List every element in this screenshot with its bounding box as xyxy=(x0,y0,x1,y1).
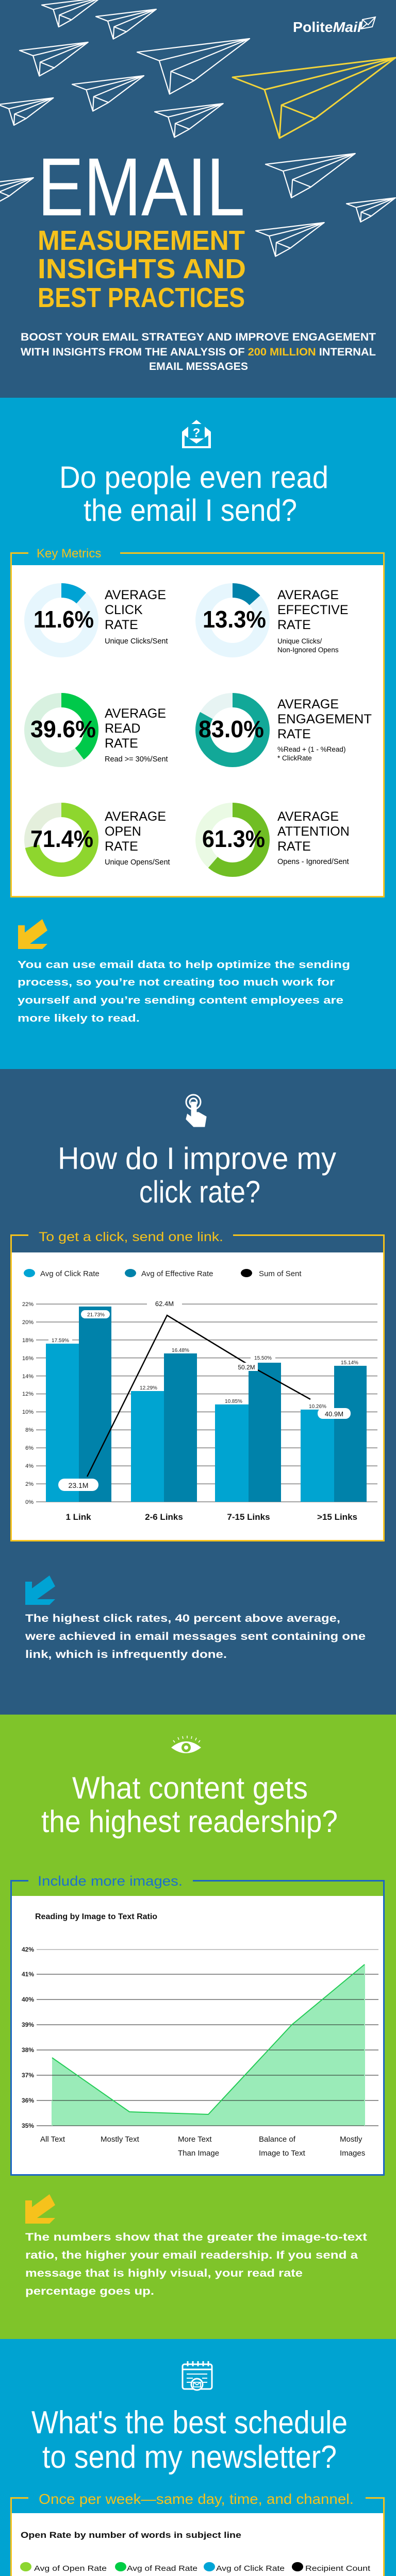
area series xyxy=(52,1964,365,2126)
heading: Do people even read the email I send?: the email I send? xyxy=(84,493,297,528)
panel: readership chart: Than Image xyxy=(178,2149,219,2158)
label: Include more images.: Include more images. xyxy=(38,1873,183,1889)
metric: effective rate: AVERAGE xyxy=(277,588,339,602)
panel: readership chart: 40% xyxy=(22,1996,34,2003)
panel: click rate chart: 6% xyxy=(25,1445,34,1451)
panel: click rate chart: 12% xyxy=(22,1391,34,1397)
bar value labels xyxy=(48,1310,358,1410)
text block: section 2 insight: were achieved in email messages sent containing one xyxy=(25,1631,366,1642)
metric: engagement rate: RATE xyxy=(277,727,311,741)
title: EMAIL Measurement Insights and Best Practices xyxy=(38,141,246,313)
title: EMAIL Measurement Insights and Best Practices: INSIGHTS AND xyxy=(38,253,246,284)
x-axis labels: 1 Link xyxy=(65,1512,91,1522)
icon: calendar with envelope xyxy=(183,2361,212,2390)
metric: attention rate: ATTENTION xyxy=(277,824,350,839)
legend: Recipient Count xyxy=(305,2564,371,2573)
subtitle: WITH INSIGHTS FROM THE ANALYSIS OF 200 MILLION INTERNAL xyxy=(21,346,376,358)
legend: Avg of Click Rate xyxy=(216,2564,285,2573)
paper planes illustration xyxy=(0,0,395,257)
metric: click rate: RATE xyxy=(105,618,138,632)
heading: Do people even read the email I send? xyxy=(59,460,328,528)
label: To get a click, send one link.: To get a click, send one link. xyxy=(39,1230,223,1244)
metric: read rate: RATE xyxy=(105,736,138,751)
panel: readership chart: 41% xyxy=(22,1971,34,1978)
metric: engagement rate: %Read + (1 - %Read) xyxy=(277,745,345,753)
header background xyxy=(0,0,396,398)
legend: Avg of Effective Rate xyxy=(141,1269,213,1278)
arrow: cyan xyxy=(25,1575,55,1605)
heading: What's the best schedule to send my newsletter?: to send my newsletter? xyxy=(42,2439,337,2475)
panel: click rate chart: 62.4M xyxy=(155,1300,174,1308)
legend xyxy=(20,2562,371,2573)
metric: open rate: RATE xyxy=(105,839,138,854)
icon: envelope with question mark: ? xyxy=(193,426,200,440)
panel: click rate chart: 8% xyxy=(25,1427,34,1433)
text block: section 1 insight: You can use email data to help optimize the sending xyxy=(18,959,350,971)
chart title: Open Rate by number of words in subject line xyxy=(21,2530,241,2540)
metric: attention rate: 61.3% xyxy=(202,825,265,852)
panel: readership chart: More Text xyxy=(178,2135,212,2144)
panel: readership chart: Mostly Text xyxy=(101,2135,140,2144)
heading: What content gets the highest readership?: What content gets xyxy=(72,1771,308,1805)
metric: open rate: AVERAGE xyxy=(105,809,166,824)
bars xyxy=(46,1307,367,1502)
metric: attention rate: Opens - Ignored/Sent xyxy=(277,858,349,866)
metric: read rate: AVERAGE xyxy=(105,706,166,721)
x-axis labels: 7-15 Links xyxy=(227,1512,270,1522)
bar value labels: 10.26% xyxy=(309,1404,326,1410)
panel: readership chart: Images xyxy=(340,2149,365,2158)
panel: click rate chart: 2% xyxy=(25,1481,34,1487)
panel: click rate chart: 18% xyxy=(22,1337,34,1344)
section 4 background xyxy=(0,2339,396,2576)
metric: engagement rate xyxy=(199,697,372,762)
label: Key Metrics: Key Metrics xyxy=(37,547,101,561)
panel: schedule chart xyxy=(11,2488,384,2576)
panel: readership chart xyxy=(11,1871,384,2175)
bar value labels: 15.50% xyxy=(254,1355,272,1361)
section 1 background xyxy=(0,398,396,1069)
heading: What's the best schedule to send my newsletter? xyxy=(31,2405,348,2475)
heading: How do I improve my click rate?: click rate? xyxy=(139,1175,260,1209)
title: EMAIL Measurement Insights and Best Practices: MEASUREMENT xyxy=(38,225,245,256)
text block: section 1 insight: more likely to read. xyxy=(18,1013,140,1024)
heading: What's the best schedule to send my newsletter?: What's the best schedule xyxy=(31,2405,348,2441)
panel: readership chart: 36% xyxy=(22,2097,34,2104)
subtitle: BOOST YOUR EMAIL STRATEGY AND IMPROVE ENGAGEMENT xyxy=(21,331,376,343)
metric: read rate xyxy=(30,700,168,764)
metric: engagement rate: * ClickRate xyxy=(277,754,312,762)
text block: section 3 insight: message that is highly visual, your read rate xyxy=(25,2267,303,2279)
panel: readership chart: Mostly xyxy=(340,2135,362,2144)
text block: section 3 insight: ratio, the higher your email readership. If you send a xyxy=(25,2249,358,2261)
bar value labels: 21.73% xyxy=(87,1312,105,1318)
legend: Avg of Read Rate xyxy=(127,2564,197,2573)
subtitle: EMAIL MESSAGES xyxy=(149,361,248,372)
metric: effective rate: EFFECTIVE xyxy=(277,603,349,617)
bar value labels: 17.59% xyxy=(52,1338,69,1344)
section 3 background xyxy=(0,1715,396,2339)
legend xyxy=(24,1269,302,1278)
metric: attention rate: RATE xyxy=(277,839,311,854)
bar value labels: 10.85% xyxy=(225,1399,242,1404)
arrow: yellow xyxy=(18,919,47,949)
panel: readership chart: Balance of xyxy=(259,2135,296,2144)
panel: click rate chart: 10% xyxy=(22,1409,34,1415)
metric: open rate: OPEN xyxy=(105,824,141,839)
heading: What content gets the highest readership? xyxy=(41,1771,338,1839)
metric: open rate xyxy=(30,809,170,870)
metric: attention rate xyxy=(202,809,350,870)
metric: effective rate: Non-Ignored Opens xyxy=(277,646,339,654)
metric: engagement rate: 83.0% xyxy=(199,716,264,742)
text block: section 3 insight xyxy=(25,2231,367,2297)
chart title: Reading by Image to Text Ratio xyxy=(35,1912,157,1921)
panel: click rate chart: 14% xyxy=(22,1374,34,1380)
panel: readership chart: 42% xyxy=(22,1946,34,1953)
x-axis labels: >15 Links xyxy=(317,1512,357,1522)
panel: click rate chart: 4% xyxy=(25,1463,34,1469)
text block: section 1 insight: yourself and you’re sending content employees are xyxy=(18,995,343,1006)
metric: effective rate xyxy=(203,588,349,654)
metric: click rate: AVERAGE xyxy=(105,588,166,602)
text block: section 3 insight: The numbers show that the greater the image-to-text xyxy=(25,2231,367,2243)
legend: Avg of Click Rate xyxy=(40,1269,100,1278)
metric: read rate: READ xyxy=(105,721,140,736)
metric: click rate xyxy=(31,588,168,650)
icon: envelope with question mark xyxy=(182,420,211,448)
metric: open rate: Unique Opens/Sent xyxy=(105,858,170,867)
metric: effective rate: RATE xyxy=(277,618,311,632)
panel: click rate chart xyxy=(11,1226,384,1540)
heading: What content gets the highest readership?: the highest readership? xyxy=(41,1804,338,1839)
icon: hand pointer xyxy=(186,1095,206,1126)
arrow: yellow xyxy=(25,2194,55,2224)
panel: readership chart: 35% xyxy=(22,2122,34,2129)
panel: click rate chart: 0% xyxy=(25,1499,34,1505)
section 2 background xyxy=(0,1069,396,1715)
text block: section 1 insight xyxy=(18,959,350,1024)
panel: readership chart: 39% xyxy=(22,2021,34,2028)
panel: click rate chart: 22% xyxy=(22,1301,34,1308)
metric: read rate: Read >= 30%/Sent xyxy=(105,755,168,764)
label: Once per week: Once per week—same day, time, and channel. xyxy=(39,2491,354,2507)
line: sum of sent xyxy=(87,1315,310,1477)
metric: click rate: Unique Clicks/Sent xyxy=(105,637,168,646)
panel: click rate chart: 23.1M xyxy=(69,1481,88,1489)
panel: readership chart: 38% xyxy=(22,2046,34,2054)
logo: PoliteMail: PoliteMail xyxy=(293,19,362,35)
text block: section 2 insight: link, which is infrequently done. xyxy=(25,1649,227,1660)
metric: attention rate: AVERAGE xyxy=(277,809,339,824)
text block: section 1 insight: process, so you’re not creating too much work for xyxy=(18,977,335,988)
bar value labels: 16.48% xyxy=(172,1348,189,1353)
x-axis labels xyxy=(65,1512,357,1522)
metric: click rate: 11.6% xyxy=(34,606,94,633)
panel: readership chart: All Text xyxy=(40,2135,65,2144)
bar value labels: 15.14% xyxy=(341,1360,358,1366)
text block: section 2 insight xyxy=(25,1613,366,1660)
bar value labels: 12.29% xyxy=(140,1385,157,1391)
grid and axis xyxy=(36,1304,377,1502)
metric: engagement rate: ENGAGEMENT xyxy=(277,712,372,726)
metric: effective rate: 13.3% xyxy=(203,606,266,633)
metric: click rate: CLICK xyxy=(105,603,143,617)
panel: readership chart: Image to Text xyxy=(259,2149,306,2158)
metric: open rate: 71.4% xyxy=(30,825,93,852)
title: EMAIL Measurement Insights and Best Practices: BEST PRACTICES xyxy=(38,282,245,313)
metric: read rate: 39.6% xyxy=(30,716,96,742)
legend: Avg of Open Rate xyxy=(34,2564,107,2573)
heading: Do people even read the email I send?: Do people even read xyxy=(59,460,328,495)
panel: click rate chart: 40.9M xyxy=(325,1410,343,1418)
subtitle xyxy=(21,331,376,372)
panel: key metrics xyxy=(11,546,384,896)
x-axis labels: 2-6 Links xyxy=(145,1512,183,1522)
text block: section 3 insight: percentage goes up. xyxy=(25,2285,154,2297)
panel: click rate chart: 20% xyxy=(22,1319,34,1326)
metric: engagement rate: AVERAGE xyxy=(277,697,339,711)
legend: Sum of Sent xyxy=(259,1269,302,1278)
panel: click rate chart: 50.2M xyxy=(238,1364,255,1371)
panel: click rate chart: 16% xyxy=(22,1355,34,1362)
title: EMAIL Measurement Insights and Best Practices: EMAIL xyxy=(38,141,245,233)
text block: section 2 insight: The highest click rates, 40 percent above average, xyxy=(25,1613,340,1624)
heading: How do I improve my click rate?: How do I improve my xyxy=(58,1141,336,1176)
metric: effective rate: Unique Clicks/ xyxy=(277,637,322,645)
icon: eye xyxy=(171,1736,201,1753)
heading: How do I improve my click rate? xyxy=(58,1141,336,1209)
panel: readership chart: 37% xyxy=(22,2072,34,2079)
